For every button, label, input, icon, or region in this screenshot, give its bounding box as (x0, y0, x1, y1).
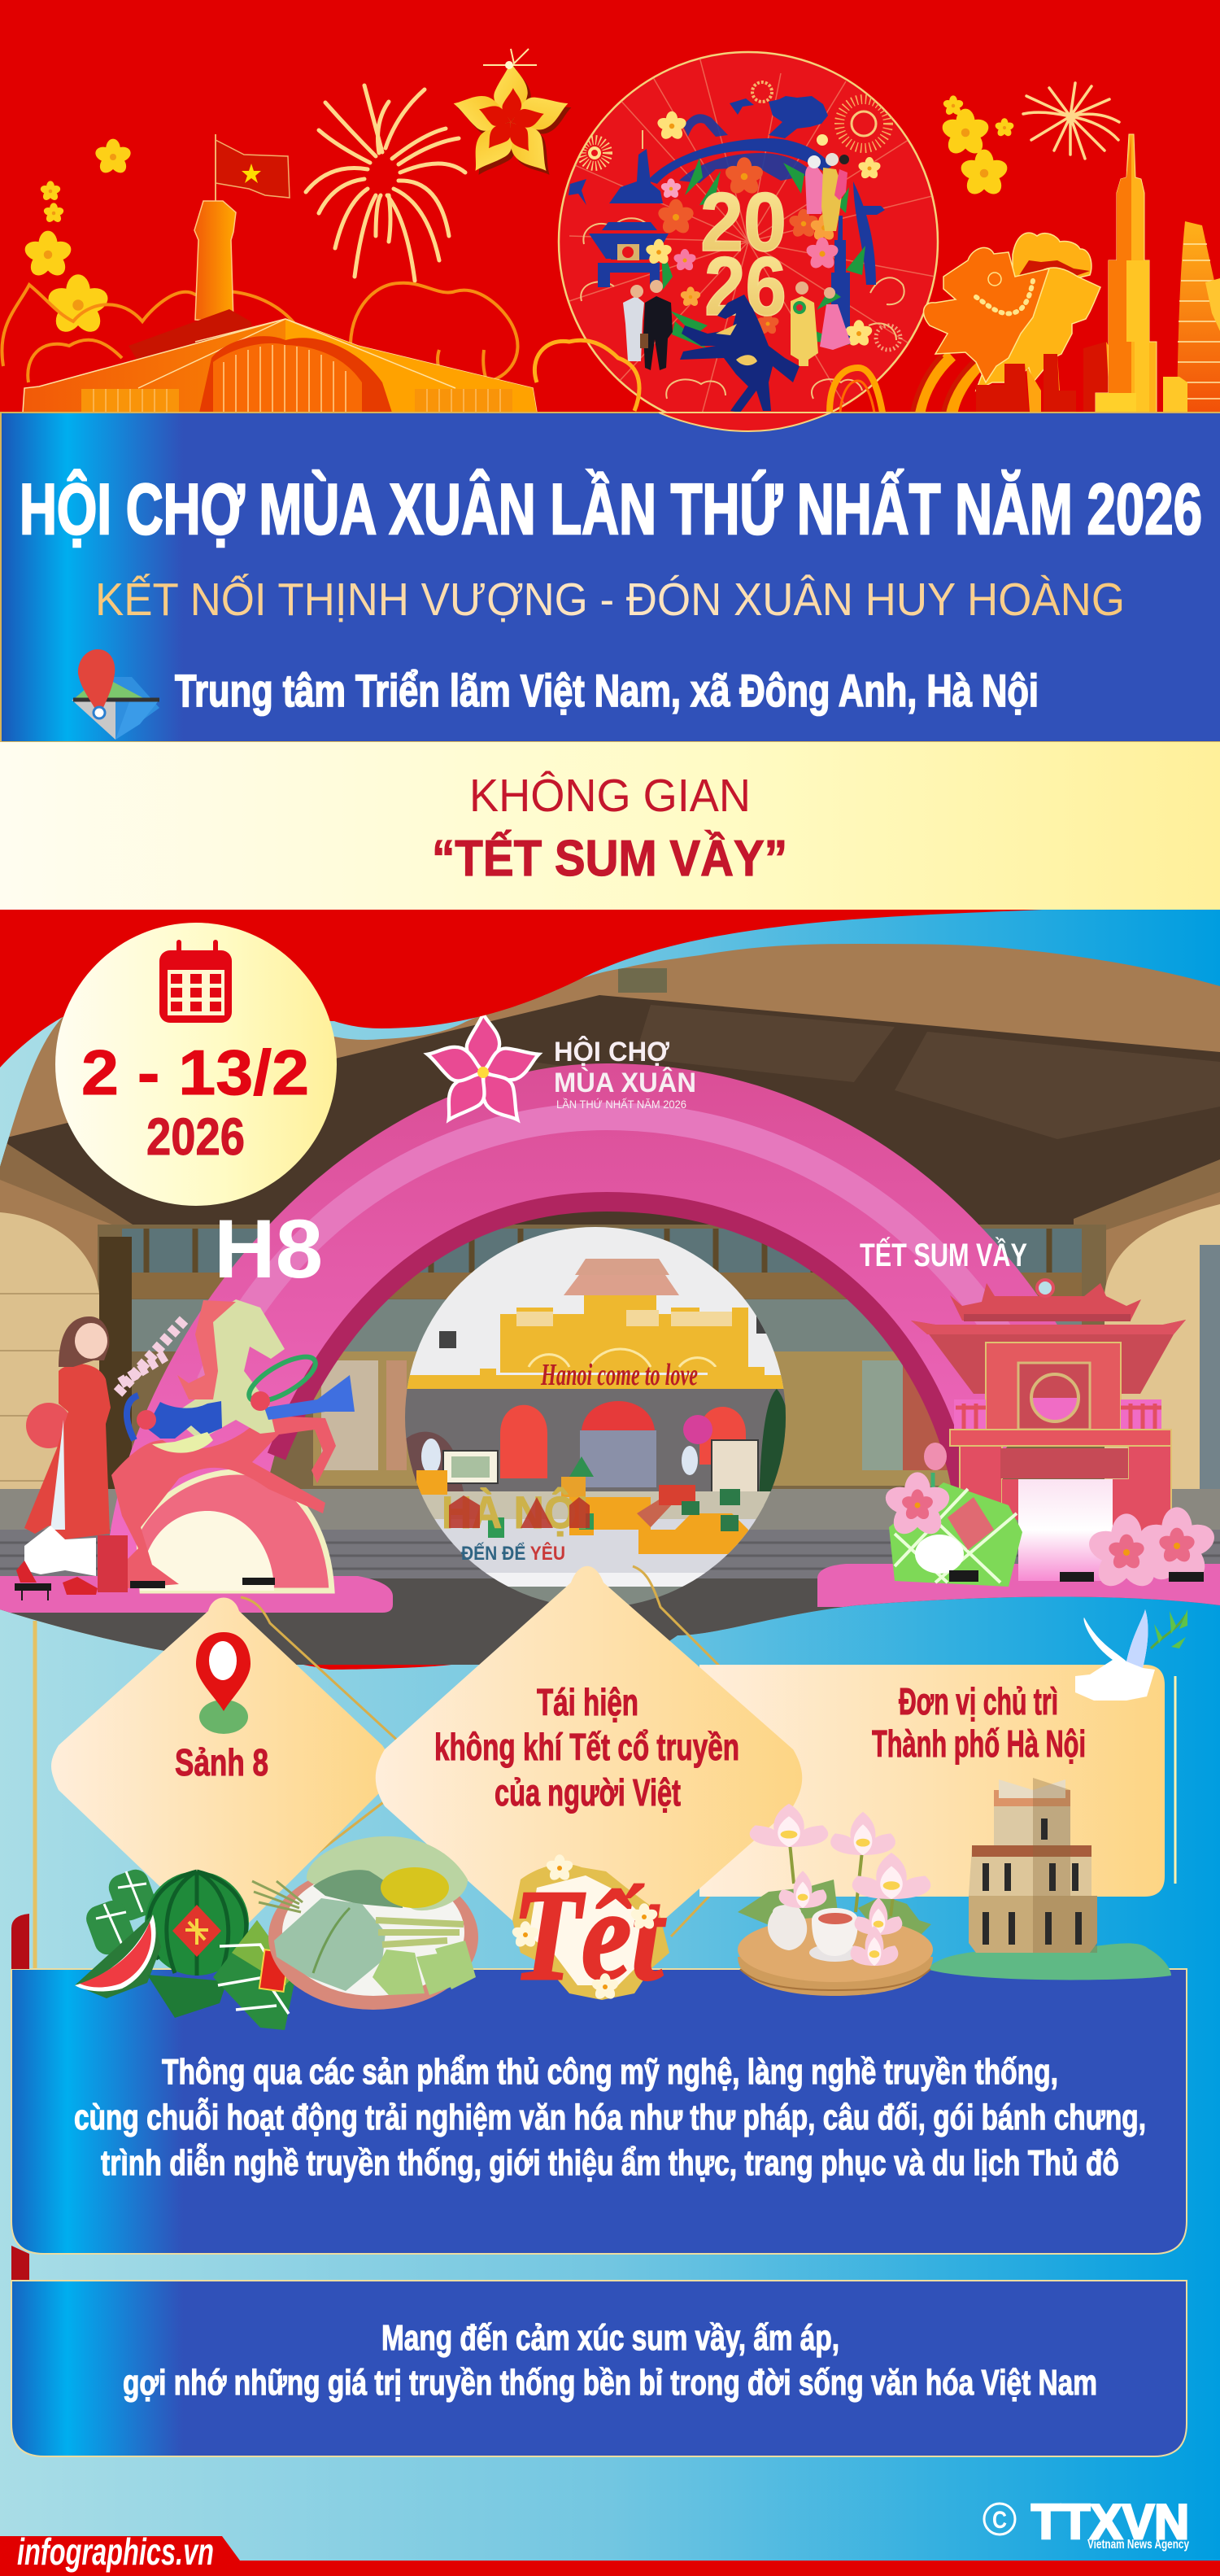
firework right (1023, 83, 1119, 159)
arch logo: MÙA XUÂN (554, 1068, 696, 1098)
panel: title block (0, 413, 1220, 742)
golden lion dance and skyline (913, 134, 1220, 413)
people and navy horse (623, 153, 851, 413)
hall label: Sảnh 8 (175, 1741, 268, 1784)
tradition text: không khí Tết cổ truyền (434, 1726, 739, 1768)
photo: exhibition gate (0, 928, 1220, 1676)
date badge (55, 923, 337, 1206)
spotlights (15, 1570, 1204, 1600)
panel: hall diamond (51, 1598, 390, 1941)
inset circle photo (404, 1227, 792, 1611)
year 2026: 26 (704, 240, 786, 333)
inset letters HA NOI: HÀ NỘI (442, 1487, 588, 1538)
inset sign Hanoi come to love: Hanoi come to love (540, 1358, 698, 1392)
description text (74, 2052, 1146, 2183)
organiser text: Đơn vị chủ trì (899, 1680, 1058, 1722)
tradition text: của người Việt (495, 1771, 681, 1814)
pink platforms (0, 1576, 393, 1613)
arch logo: HỘI CHỢ (554, 1036, 669, 1068)
central 2026 medallion (559, 52, 938, 431)
pink arch (106, 1063, 1082, 1570)
panel: blue description bottom (11, 2246, 1187, 2456)
illustration: turtle tower on island (926, 1778, 1171, 1980)
background sky panel (0, 910, 1220, 2576)
red wave (0, 910, 1043, 1068)
panel: organiser card (699, 1665, 1165, 1897)
arch logo: LẦN THỨ NHẤT NĂM 2026 (556, 1098, 686, 1111)
firework left (306, 85, 465, 281)
inset pagoda marks (449, 1495, 590, 1528)
tradition text (434, 1681, 739, 1814)
wreath flowers (645, 111, 882, 349)
panel: tradition diamond (376, 1566, 802, 1987)
closing text: Mang đến cảm xúc sum vầy, ấm áp, (381, 2318, 839, 2358)
panel: blue description top (11, 1914, 1187, 2254)
building facade (98, 1225, 1106, 1493)
illustration: Tet calligraphy: Tết (512, 1862, 666, 2007)
icon: calendar (159, 942, 232, 1023)
closing text (123, 2318, 1097, 2403)
theme line 2: “TẾT SUM VẦY” (432, 831, 787, 887)
illustration: basket with leaves (252, 1836, 478, 2010)
arch sign H8: H8 (214, 1203, 323, 1295)
subtitle: KẾT NỐI THỊNH VƯỢNG - ĐÓN XUÂN HUY HOÀNG (95, 573, 1125, 626)
panel: theme heading (0, 742, 1220, 910)
gold blossom emblem (448, 49, 577, 185)
icon: dove (1075, 1609, 1187, 1701)
date range: 2 - 13/2 (81, 1037, 309, 1108)
Ba Dinh hall (23, 319, 537, 413)
yellow apricot blossoms (22, 95, 1015, 337)
circle lower tip overlapping the title panel (659, 413, 831, 431)
illustration: banh chung and watermelon (75, 1866, 296, 2030)
header illustration banner (0, 48, 1220, 412)
clouds outline (2, 283, 882, 413)
source text: infographics.vn (17, 2530, 214, 2573)
date year: 2026 (146, 1107, 245, 1166)
horse and lady standee (16, 1299, 355, 1595)
icon: map pin (72, 649, 159, 740)
illustration: lotus and tea tray (738, 1804, 933, 1996)
copyright mark: C (992, 2507, 1007, 2534)
icon: location pin (196, 1632, 251, 1734)
gate standee (882, 1280, 1218, 1593)
arch sign Tet Sum Vay: TẾT SUM VẦY (860, 1236, 1027, 1273)
agency logo: TTXVN (1031, 2495, 1189, 2549)
year 2026: 20 (700, 176, 786, 269)
year 2026 (700, 176, 786, 333)
Ba Dinh flag and tower (129, 134, 290, 362)
gold frame lines (35, 1566, 1175, 1969)
arch logo (422, 1014, 696, 1129)
blue arch bridge, tower, dragon (569, 96, 885, 344)
footer band (0, 2530, 1220, 2576)
theme line 1: KHÔNG GIAN (469, 770, 751, 822)
panel: organiser card: Thành phố Hà Nội (872, 1722, 1086, 1765)
tradition text: Tái hiện (537, 1681, 638, 1723)
copyright mark (984, 2504, 1015, 2535)
inset letters den de yeu: ĐẾN ĐỂ YÊU (461, 1542, 565, 1565)
